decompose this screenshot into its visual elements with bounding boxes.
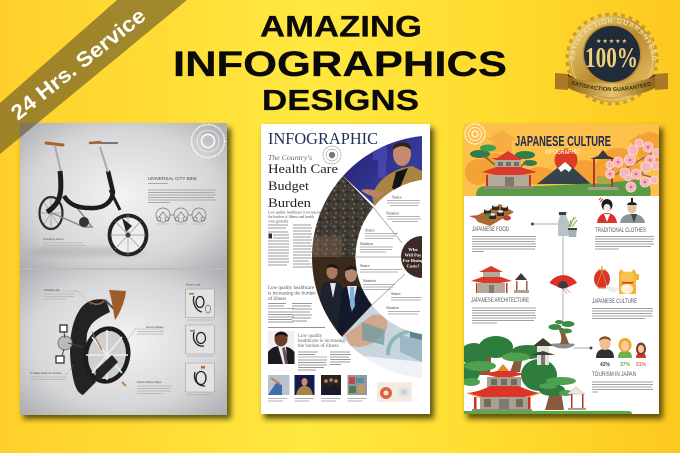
people statistics	[596, 336, 647, 368]
callout: portable grip: Portable grip	[44, 288, 60, 292]
section: japanese food: JAPANESE FOOD	[472, 226, 509, 233]
subheading: low quality healthcare: of illness	[268, 297, 286, 302]
subheading: low quality healthcare: Low quality healthcare	[268, 286, 315, 291]
icon: pagoda	[470, 144, 537, 189]
title: AMAZING	[260, 10, 422, 44]
header illustration	[464, 124, 664, 196]
inner white disc with text sections: Stance	[392, 196, 402, 200]
icon: temple	[471, 266, 512, 293]
heading: japanese culture	[515, 133, 611, 156]
headline: The Country's	[268, 153, 312, 162]
how to use steps: How to use	[186, 282, 201, 286]
headline	[268, 153, 338, 210]
callout: u shape frame	[30, 365, 73, 380]
description text	[148, 184, 217, 202]
inner white disc with text sections: Situation	[363, 279, 376, 283]
title: DESIGNS	[262, 85, 419, 117]
ribbon: 24 hrs service: 24 Hrs. Service	[7, 4, 150, 125]
note: unfolding shows: Unfolding shows	[43, 237, 64, 241]
icon: sake set	[558, 212, 577, 237]
callout: u shape frame: U shape frame for rimmes	[30, 371, 62, 375]
inner white disc with text sections: Stance	[365, 228, 375, 232]
person: 37 percent: 37%	[620, 362, 631, 368]
inner white disc with text sections: Situation	[386, 306, 399, 310]
icon: gazebo	[514, 273, 529, 293]
panel: japanese culture infographic	[460, 124, 664, 419]
subheading: low quality healthcare: is increasing the burden	[268, 292, 316, 296]
panel seam	[20, 268, 227, 270]
heading: japanese culture: JAPANESE CULTURE	[515, 133, 611, 150]
icons: folding steps	[156, 208, 206, 224]
icon: gazebo	[587, 150, 619, 190]
section: japanese architecture: JAPANESE ARCHITECTURE	[471, 297, 529, 304]
icon: geisha	[597, 198, 617, 223]
panel: bicycle brochure	[20, 123, 231, 419]
quote beside portrait	[298, 334, 345, 349]
note: unfolding shows	[43, 237, 85, 250]
section: traditional clothes: TRADITIONAL CLOTHES	[595, 227, 646, 234]
inner white disc with text sections: Stance	[360, 264, 370, 268]
callout: who will pay: Who	[408, 247, 418, 252]
ground strip	[464, 411, 632, 414]
icon: samurai	[620, 198, 645, 223]
callout: all-inch wheels: All-inch wheels	[146, 325, 164, 329]
ribbon: 24 hrs service	[0, 0, 187, 154]
gold ribbon: SATISFACTION GUARANTEED	[572, 80, 651, 91]
badge: crest	[465, 124, 485, 144]
quote beside portrait: Low quality	[298, 334, 323, 339]
timeline connector	[531, 222, 592, 350]
section: japanese culture: JAPANESE CULTURE	[592, 298, 637, 305]
heading: japanese culture: INFOGRAPHIC	[545, 149, 580, 156]
section: japanese culture	[592, 266, 653, 318]
section: traditional clothes	[595, 198, 654, 249]
standfirst: costs globally	[268, 220, 289, 224]
standfirst	[268, 210, 322, 224]
inner white disc with text sections: Situation	[360, 242, 373, 246]
panel: health care infographic	[260, 124, 438, 424]
photo: men in suits	[312, 257, 372, 337]
thumbnails row	[268, 375, 367, 401]
quote beside portrait: the burden of illness	[298, 344, 339, 349]
circular photo collage	[312, 136, 422, 378]
icon: cherry blossoms	[606, 139, 662, 192]
ground	[476, 180, 651, 196]
bicycle, unfolded	[25, 142, 146, 257]
heading: infographic: INFOGRAPHIC	[268, 129, 378, 148]
number: 100%: 100%	[585, 42, 638, 74]
icon: red fan	[550, 275, 577, 294]
inner white disc with text sections: Situation	[386, 212, 399, 216]
badge: 100% satisfaction guaranteed: SATISFACTION GUARANTEED	[569, 18, 657, 60]
bicycle, folded	[56, 290, 132, 395]
callout: portable grip	[44, 288, 91, 305]
article columns	[268, 225, 312, 267]
small dark pagoda	[531, 338, 555, 365]
icon: rising sun	[554, 148, 578, 168]
icon: lantern	[594, 266, 620, 293]
section: japanese architecture	[471, 266, 536, 323]
how to use steps	[186, 282, 214, 394]
quote beside portrait: healthcare is increasing	[298, 339, 345, 344]
title	[173, 10, 507, 117]
icon: sushi board	[469, 204, 514, 226]
large temple	[467, 364, 540, 412]
photo: crowd	[312, 176, 373, 257]
callout: who will pay: Will Pay	[405, 252, 422, 258]
icon: mount fuji	[537, 165, 591, 184]
small gazebo	[567, 387, 586, 410]
chart card	[377, 382, 412, 402]
subheading: low quality healthcare	[268, 286, 316, 302]
section: tourism in japan: TOURISM IN JAPAN	[592, 371, 636, 378]
icon: brochure crest	[192, 124, 224, 158]
stars: ★★★★★	[596, 38, 628, 45]
person: 42 percent: 42%	[600, 362, 611, 368]
article snippets	[268, 304, 312, 322]
standfirst: Low quality healthcare is increasing	[268, 210, 322, 214]
icon: lucky cat	[619, 269, 639, 294]
heading: universal city bike: UNIVERSAL CITY BIKE	[148, 176, 197, 181]
badge: 100% satisfaction guaranteed	[555, 12, 668, 106]
icon: bonsai	[548, 320, 575, 348]
illustration: temple in the trees	[460, 336, 632, 414]
section: japanese food	[469, 204, 536, 252]
callout: fixed folding shape	[137, 380, 172, 394]
inner white disc with text sections	[355, 180, 422, 334]
callout: all-inch wheels	[127, 325, 164, 341]
photo: hospital patient	[342, 305, 422, 378]
person: 21 percent: 21%	[636, 362, 647, 368]
quote snippets	[298, 352, 351, 370]
headline: Burden	[268, 195, 312, 210]
section: tourism in japan	[592, 336, 653, 392]
inner white disc with text sections: Stance	[391, 292, 401, 296]
callout: fixed folding shape: Fixed folding shape	[137, 380, 162, 384]
title: INFOGRAPHICS	[173, 45, 507, 84]
callout: who will pay: Costs?	[406, 264, 420, 268]
callout: who will pay: For Rising	[403, 258, 424, 263]
headline: Budget	[268, 178, 309, 193]
standfirst: the burden of illness and health	[268, 215, 314, 219]
photo: speaker	[343, 136, 422, 206]
headline: Health Care	[268, 161, 338, 176]
photo: portrait	[268, 331, 294, 364]
icon: seal	[323, 146, 341, 164]
callout: who will pay	[401, 236, 424, 278]
